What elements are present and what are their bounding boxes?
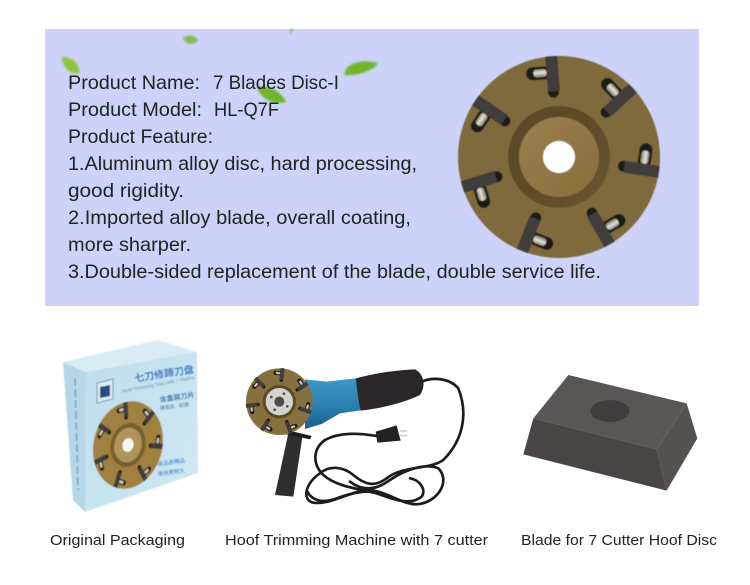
screw hole [590, 400, 630, 422]
product photo: original packaging box: Hoof Trimming Disc with 7 blades [121, 375, 196, 395]
power cord [306, 379, 463, 504]
product photo: original packaging box: 使用更耐久 [157, 466, 186, 478]
product text block: 2.Imported alloy blade, overall coating, [68, 207, 411, 229]
product text block: 7 Blades Disc-I [213, 72, 339, 94]
product photo: hoof trimming machine [241, 363, 463, 504]
product photo: original packaging box: 高品质精品 [157, 456, 186, 468]
product photo: original packaging box: 含盒装刀片 [159, 390, 195, 404]
product photo: carbide blade block [523, 375, 697, 491]
handle collar [285, 430, 312, 439]
caption: blade: Blade for 7 Cutter Hoof Disc [521, 532, 718, 549]
product text block: Product Feature: [68, 126, 213, 148]
product text block [68, 72, 601, 283]
caption: hoof trimming machine: Hoof Trimming Machine with 7 cutter [225, 532, 488, 549]
product photo: original packaging box: 七刀修蹄刀盘 [133, 363, 195, 385]
disc photo [458, 56, 662, 258]
side handle [275, 433, 303, 497]
product text block: HL-Q7F [214, 99, 279, 121]
product text block: 1.Aluminum alloy disc, hard processing, [68, 153, 417, 175]
disc mounted on grinder [241, 363, 319, 441]
caption: original packaging: Original Packaging [50, 532, 185, 549]
plug [376, 425, 407, 443]
product text block: Product Name: [68, 72, 200, 94]
product text block: 3.Double-sided replacement of the blade, double service life. [68, 261, 601, 283]
grinder body [305, 378, 363, 429]
decorative green leaves [62, 29, 378, 103]
rear grip [356, 369, 424, 411]
panel: product information [45, 29, 699, 306]
product text block: good rigidity. [68, 180, 184, 202]
product photo: original packaging box: 硬度高 · 耐磨 [159, 401, 189, 412]
product text block: Product Model: [68, 99, 202, 121]
product text block: more sharper. [68, 234, 191, 256]
product photo: original packaging box [63, 340, 198, 512]
